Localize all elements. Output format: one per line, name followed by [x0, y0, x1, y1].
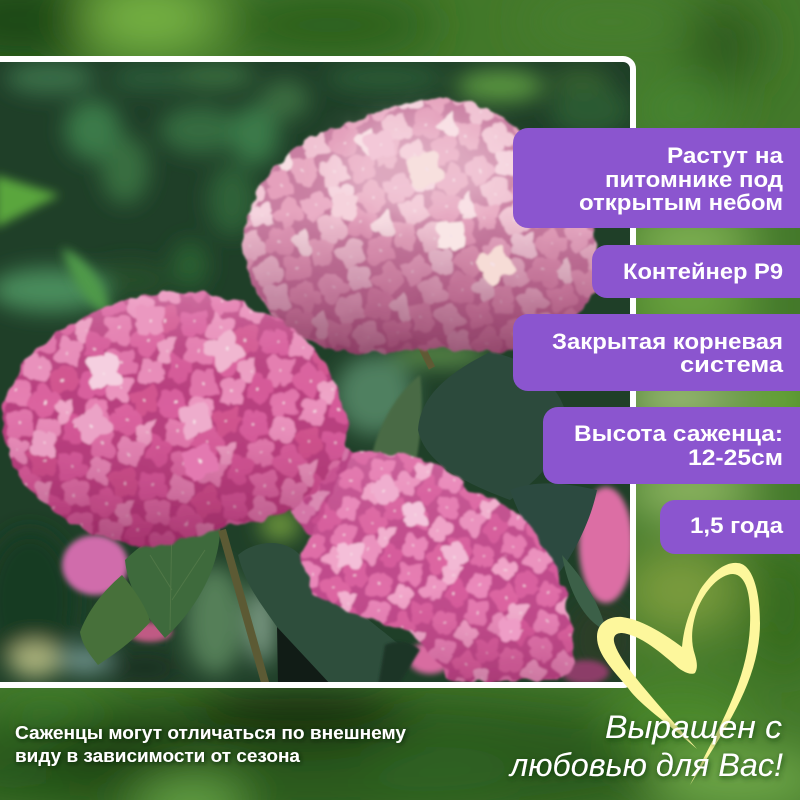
panel: container: Контейнер Р9 — [623, 259, 783, 284]
panel: seedling height: Высота саженца: — [574, 421, 783, 446]
flower head: lower — [303, 452, 575, 682]
panel: grown outdoors: открытым небом — [579, 190, 783, 215]
small blurred flowers — [62, 487, 633, 684]
panel: age: 1,5 года — [690, 513, 784, 538]
white photo frame — [0, 59, 633, 685]
icon: yellow hand-drawn heart — [597, 563, 760, 785]
panel: grown outdoors — [513, 128, 800, 228]
flower head: lower, back lobe — [290, 446, 357, 537]
flower head: top — [243, 99, 596, 353]
slogan: grown with love: любовью для Вас! — [508, 747, 783, 783]
panel: grown outdoors: питомнике под — [605, 167, 783, 192]
flower head: left — [2, 292, 347, 546]
note: seedlings may differ: Саженцы могут отличаться по внешнему — [15, 723, 406, 743]
note: seedlings may differ: виду в зависимости от сезона — [15, 746, 301, 766]
leaves — [80, 340, 606, 686]
panel: root system: система — [680, 352, 784, 377]
panel: root system — [513, 314, 800, 391]
panel: root system: Закрытая корневая — [552, 329, 783, 354]
panel: grown outdoors: Растут на — [667, 143, 784, 168]
slogan: grown with love — [508, 709, 783, 783]
photo of pink hydrangeas — [0, 60, 634, 686]
bright green leaves — [0, 175, 110, 316]
panel: seedling height — [543, 407, 800, 484]
panel: seedling height: 12-25см — [688, 445, 783, 470]
note: seedlings may differ — [15, 723, 406, 766]
blurred foliage backdrop — [0, 62, 634, 682]
panel: age — [660, 500, 800, 554]
slogan: grown with love: Выращен с — [605, 709, 782, 745]
panel: container — [592, 245, 800, 298]
